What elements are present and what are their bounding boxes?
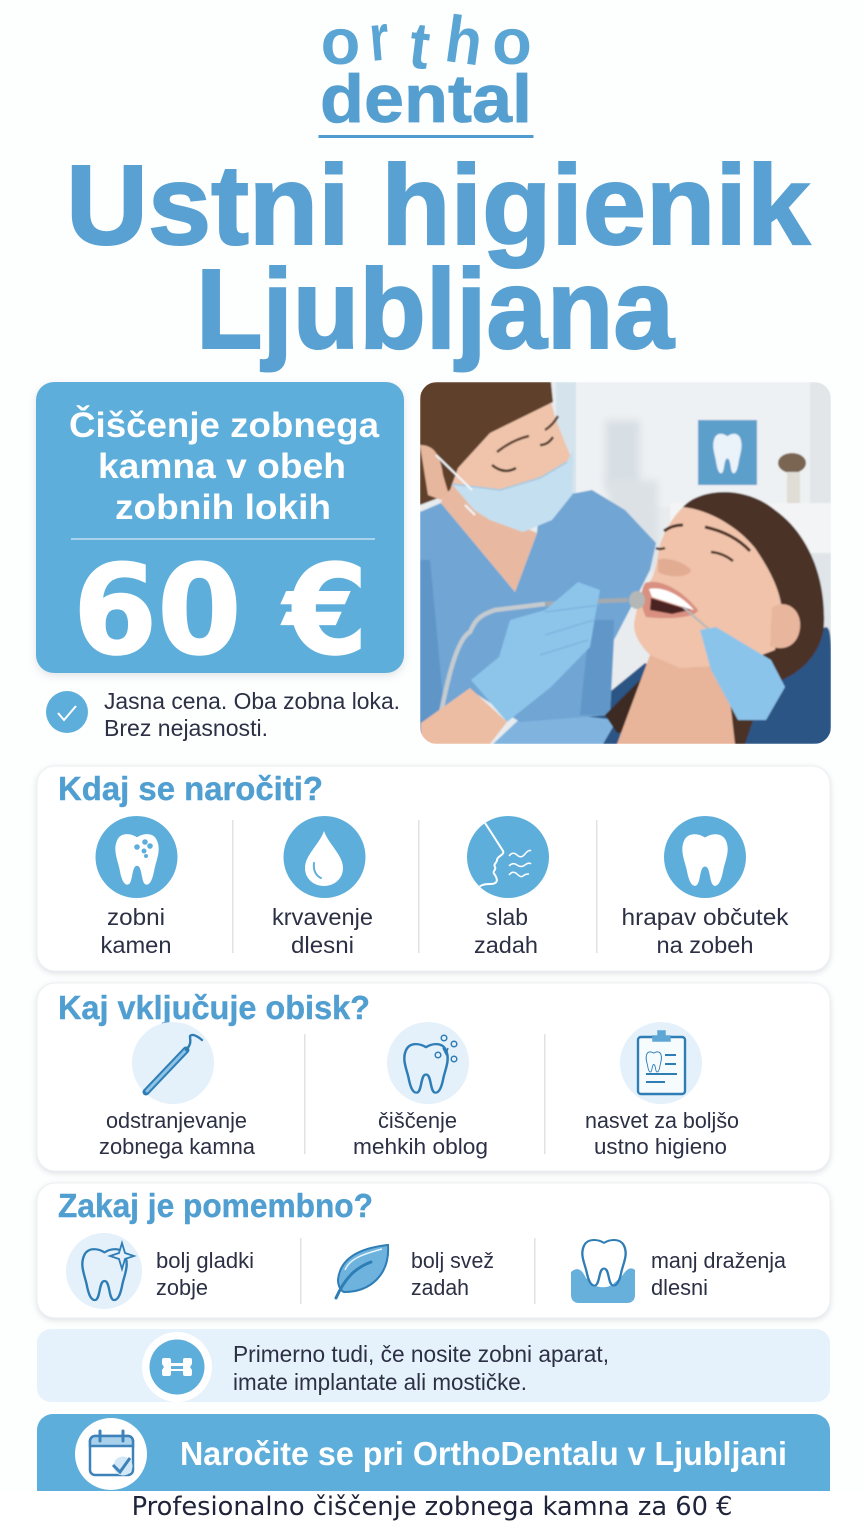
- price description: Čiščenje zobnega: [69, 405, 380, 445]
- patient neck: [616, 654, 736, 744]
- icon: drop: [284, 816, 366, 898]
- hygienist face: [454, 402, 570, 490]
- main title: Ustni higienik: [66, 142, 810, 268]
- label: zadah: [411, 1275, 469, 1300]
- label: nasvet za boljšo: [585, 1108, 739, 1133]
- label: zadah: [474, 932, 538, 958]
- logo: ortho dental: o: [492, 5, 532, 78]
- call to action banner: [37, 1414, 830, 1509]
- patient ear: [770, 604, 800, 648]
- label: dlesni: [291, 932, 354, 958]
- heading: Kdaj se naročiti?: [58, 770, 323, 807]
- label: [585, 1108, 739, 1159]
- clear price note: Jasna cena. Oba zobna loka.: [104, 688, 400, 714]
- icon: clipboard: [620, 1022, 702, 1104]
- handpiece tube: [438, 601, 546, 710]
- logo: ortho dental: dental: [320, 61, 532, 137]
- label: [411, 1248, 494, 1300]
- label: [474, 904, 538, 958]
- label: ustno higieno: [594, 1134, 727, 1159]
- label: [272, 904, 373, 958]
- panel: why it matters: [37, 1183, 830, 1318]
- label: na zobeh: [656, 932, 754, 958]
- patient hair: [683, 492, 824, 744]
- logo: ortho dental: h: [441, 2, 487, 80]
- main title: [66, 142, 810, 372]
- price description: [69, 405, 380, 527]
- hygienist scrubs: [420, 490, 656, 744]
- panel: what the visit includes: [37, 983, 830, 1171]
- label: [156, 1248, 254, 1300]
- heading: Zakaj je pomembno?: [58, 1187, 373, 1224]
- logo: ortho dental: t: [405, 8, 434, 84]
- icon: tooth: [664, 816, 746, 898]
- label: čiščenje: [378, 1108, 457, 1133]
- label: manj draženja: [651, 1248, 787, 1273]
- icon: cleaning tooth: [387, 1022, 469, 1104]
- photo: hygienist treating patient: [420, 382, 831, 744]
- patient nose: [658, 559, 691, 576]
- logo: ortho dental: [318, 1, 534, 138]
- price description: zobnih lokih: [115, 488, 331, 527]
- patient face: [634, 507, 782, 668]
- footer strip: [0, 1491, 864, 1536]
- logo: ortho dental: r: [366, 1, 392, 75]
- patient gown: [493, 716, 614, 744]
- icon: check circle: [46, 691, 88, 733]
- price description: kamna v obeh: [98, 447, 346, 486]
- icon: tooth with tartar: [96, 816, 178, 898]
- label: [99, 1108, 256, 1159]
- footer strip: Profesionalno čiščenje zobnega kamna za 60 €: [132, 1492, 732, 1522]
- icon: scaler instrument: [132, 1022, 214, 1104]
- label: [100, 904, 172, 958]
- clear price note: Brez nejasnosti.: [104, 715, 268, 741]
- label: hrapav občutek: [622, 904, 789, 930]
- label: slab: [486, 904, 528, 930]
- callout: braces and implants: imate implantate ali mostičke.: [233, 1369, 527, 1395]
- label: odstranjevanje: [106, 1108, 247, 1133]
- icon: tooth in gums: [571, 1240, 635, 1303]
- label: [353, 1108, 488, 1159]
- callout: braces and implants: Primerno tudi, če nosite zobni aparat,: [233, 1341, 609, 1367]
- label: dlesni: [651, 1275, 708, 1300]
- label: krvavenje: [272, 904, 373, 930]
- icon: leaf: [336, 1245, 388, 1298]
- left glove: [471, 582, 600, 722]
- label: [622, 904, 789, 958]
- panel: price: [36, 382, 404, 683]
- hygienist mask: [452, 450, 573, 532]
- label: mehkih oblog: [353, 1134, 488, 1159]
- logo: ortho dental: o: [321, 5, 360, 78]
- chair: [584, 627, 831, 744]
- clear price note: [46, 688, 400, 741]
- label: bolj svež: [411, 1248, 494, 1273]
- hygienist hair: [420, 382, 553, 505]
- label: zobnega kamna: [99, 1134, 256, 1159]
- wall poster: [698, 420, 757, 485]
- panel: when to book: [37, 766, 830, 971]
- heading: Kaj vključuje obisk?: [58, 989, 370, 1026]
- main title: Ljubljana: [196, 246, 675, 372]
- label: zobje: [156, 1275, 208, 1300]
- label: kamen: [100, 932, 172, 958]
- label: bolj gladki: [156, 1248, 254, 1273]
- arm: [421, 688, 507, 744]
- patient mouth: [641, 582, 698, 618]
- icon: sparkling tooth: [66, 1233, 142, 1309]
- icon: calendar: [75, 1418, 147, 1490]
- right glove: [700, 627, 785, 720]
- call to action banner: Naročite se pri OrthoDentalu v Ljubljani: [180, 1435, 787, 1472]
- hygienist neck: [440, 484, 538, 592]
- callout: braces and implants: [37, 1329, 830, 1402]
- label: [651, 1248, 787, 1300]
- price amount: 60 €: [73, 539, 368, 683]
- label: zobni: [107, 904, 165, 930]
- icon: braces: [142, 1332, 212, 1402]
- icon: face with breath: [467, 816, 549, 898]
